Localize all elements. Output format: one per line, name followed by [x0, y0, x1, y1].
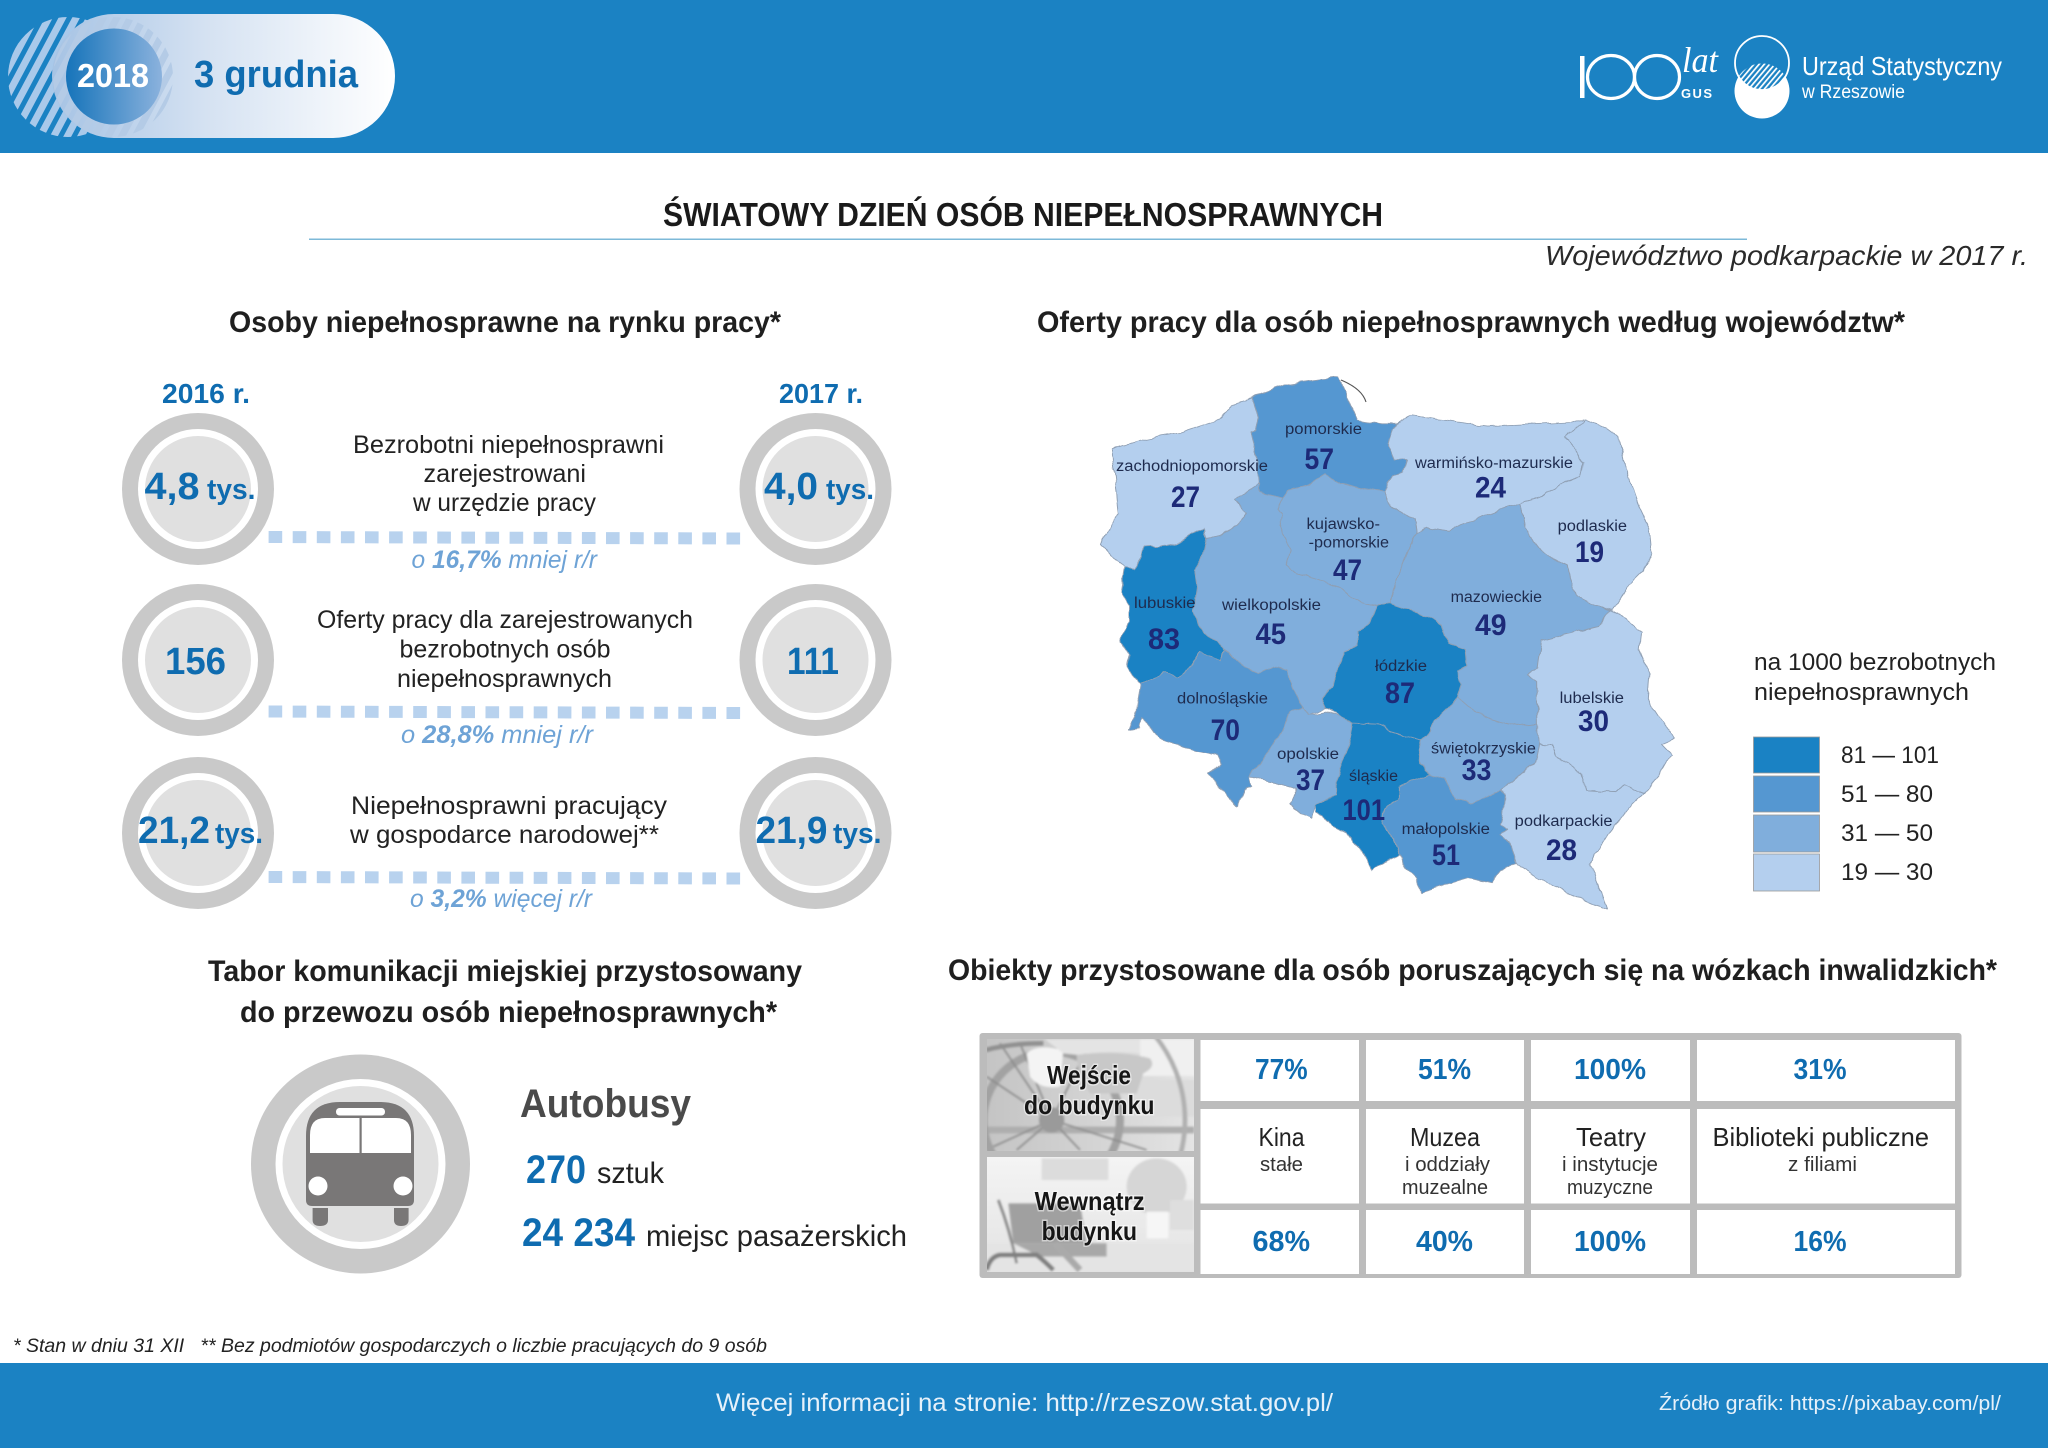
heading: facilities: Obiekty przystosowane dla osób poruszających się na wózkach inwalidzkich*	[948, 954, 1997, 987]
institution names: i instytucje	[1562, 1154, 1658, 1176]
interior percentages: 100%	[1574, 1226, 1646, 1258]
region labels and values: 49	[1475, 609, 1506, 642]
entrance percentages: 100%	[1574, 1054, 1646, 1086]
heading: labour market: Osoby niepełnosprawne na rynku pracy*	[229, 306, 781, 339]
description: zarejestrowani	[424, 460, 586, 488]
circle 4,0 tys.: 4,0	[764, 466, 818, 508]
logo: 100 lat GUS: lat	[1682, 40, 1719, 80]
passenger seats: 24 234	[522, 1211, 636, 1255]
circle 21,2 tys.: 21,2	[138, 810, 210, 852]
entrance percentages: 77%	[1255, 1054, 1308, 1086]
description	[349, 792, 668, 849]
map legend: na 1000 bezrobotnych	[1754, 649, 1996, 676]
footer source: Źródło grafik: https://pixabay.com/pl/	[1659, 1392, 2001, 1415]
passenger seats: miejsc pasażerskich	[646, 1220, 907, 1253]
label: do budynku	[1024, 1090, 1154, 1120]
description	[353, 431, 664, 517]
region labels and values: mazowieckie	[1451, 589, 1542, 606]
interior percentages: 16%	[1794, 1226, 1847, 1258]
label: Wewnątrz	[1035, 1186, 1145, 1216]
institution names: Teatry	[1576, 1122, 1646, 1152]
footer link: Więcej informacji na stronie: http://rzeszow.stat.gov.pl/	[716, 1389, 1333, 1417]
bus title: Autobusy	[520, 1082, 692, 1126]
region labels and values: 57	[1304, 443, 1334, 476]
circle 4,8 tys.	[122, 413, 274, 565]
logo: Urząd Statystyczny	[1734, 36, 2002, 118]
bus count	[526, 1148, 665, 1192]
entrance percentages: 31%	[1794, 1054, 1847, 1086]
region labels and values: śląskie	[1349, 768, 1398, 785]
row: job offers	[122, 584, 892, 749]
row: unemployed	[122, 413, 892, 574]
institution names: stałe	[1260, 1154, 1303, 1176]
change: o 16,7% mniej r/r	[412, 546, 599, 574]
circle 21,9 tys.	[740, 757, 892, 909]
circle 21,2 tys.	[122, 757, 274, 909]
map of Poland	[1100, 378, 1674, 910]
region labels and values: 30	[1578, 705, 1609, 738]
logo: Urząd Statystyczny: w Rzeszowie	[1801, 82, 1905, 103]
change: o 28,8% mniej r/r	[401, 721, 595, 749]
region labels and values: kujawsko-	[1306, 516, 1380, 533]
description: bezrobotnych osób	[400, 636, 610, 664]
photo: building entrance	[987, 1039, 1194, 1151]
bus count: 270	[526, 1148, 586, 1192]
map legend: 81 — 101	[1841, 742, 1939, 769]
subtitle: Województwo podkarpackie w 2017 r.	[1545, 240, 2028, 271]
region labels and values: zachodniopomorskie	[1116, 458, 1268, 475]
region labels and values: opolskie	[1277, 746, 1339, 763]
bus count: sztuk	[597, 1157, 665, 1190]
region labels and values: podlaskie	[1558, 518, 1627, 535]
label: budynku	[1042, 1216, 1137, 1246]
circle 4,8 tys.: tys.	[207, 474, 256, 506]
institution names: Muzea	[1410, 1122, 1480, 1152]
map legend	[1754, 649, 1996, 891]
heading: map: Oferty pracy dla osób niepełnosprawnych według województw*	[1037, 306, 1905, 339]
region labels and values: małopolskie	[1402, 821, 1490, 838]
circle 111: 111	[787, 641, 839, 683]
panel: labour market comparison	[122, 378, 892, 913]
circle 4,8 tys.: 4,8	[144, 466, 200, 508]
entrance percentages	[1255, 1054, 1847, 1086]
label: Wejście	[1047, 1060, 1131, 1090]
interior percentages: 68%	[1252, 1226, 1310, 1258]
year: 2018	[77, 57, 149, 94]
cells row 1	[1200, 1040, 1955, 1101]
region labels and values: lubuskie	[1134, 595, 1196, 612]
interior percentages	[1252, 1226, 1847, 1258]
map legend: 31 — 50	[1841, 820, 1933, 847]
institution names: Kina	[1258, 1122, 1305, 1152]
region labels and values: -pomorskie	[1309, 534, 1389, 552]
date badge	[8, 14, 395, 138]
description	[317, 606, 693, 693]
row: employed	[122, 757, 892, 913]
region labels and values: 37	[1296, 764, 1325, 797]
region labels and values: wielkopolskie	[1221, 597, 1321, 614]
heading: transport: do przewozu osób niepełnosprawnych*	[240, 996, 777, 1029]
circle 111	[740, 584, 892, 736]
institution names	[1258, 1122, 1929, 1199]
institution names: z filiami	[1788, 1154, 1857, 1176]
region labels and values: pomorskie	[1285, 421, 1362, 438]
map legend: 51 — 80	[1841, 781, 1933, 808]
logo: 100 lat GUS: GUS	[1681, 86, 1712, 101]
date: 3 grudnia	[194, 54, 359, 96]
region labels and values: 24	[1475, 472, 1506, 504]
icon: bus	[251, 1054, 470, 1274]
circle 156: 156	[165, 641, 226, 683]
heading: transport	[208, 955, 802, 1029]
institution names: muzyczne	[1567, 1177, 1653, 1199]
cells row 3	[1200, 1210, 1955, 1274]
region labels and values	[1116, 421, 1627, 872]
passenger seats	[522, 1211, 907, 1255]
institution names: i oddziały	[1405, 1154, 1490, 1176]
circle 21,2 tys.: tys.	[215, 818, 263, 850]
map legend: niepełnosprawnych	[1754, 679, 1969, 706]
year label 2017: 2017 r.	[779, 378, 863, 409]
region labels and values: 47	[1333, 554, 1362, 587]
region labels and values: 87	[1385, 677, 1415, 710]
region labels and values: świętokrzyskie	[1431, 741, 1536, 758]
region labels and values: łódzkie	[1375, 658, 1427, 675]
map legend: 19 — 30	[1841, 859, 1933, 886]
circle 4,0 tys.	[740, 413, 892, 565]
logo: Urząd Statystyczny: Urząd Statystyczny	[1802, 51, 2002, 81]
title: ŚWIATOWY DZIEŃ OSÓB NIEPEŁNOSPRAWNYCH	[663, 196, 1383, 233]
cells row 2	[1200, 1109, 1955, 1204]
region labels and values: 19	[1575, 536, 1604, 569]
description: w gospodarce narodowej**	[349, 821, 659, 849]
region labels and values: 27	[1171, 481, 1200, 514]
bus statistics	[520, 1082, 907, 1255]
description: w urzędzie pracy	[412, 489, 596, 517]
institution names: Biblioteki publiczne	[1712, 1122, 1929, 1152]
description: Oferty pracy dla zarejestrowanych	[317, 606, 693, 634]
header band	[0, 0, 2048, 153]
footnote: * Stan w dniu 31 XII ** Bez podmiotów gospodarczych o liczbie pracujących do 9 osób	[13, 1335, 767, 1357]
region labels and values: 51	[1432, 839, 1460, 872]
circle 21,9 tys.: 21,9	[756, 810, 828, 852]
change: o 3,2% więcej r/r	[410, 885, 594, 913]
photo: inside building	[986, 1157, 1194, 1272]
description: Bezrobotni niepełnosprawni	[353, 431, 664, 459]
circle 156	[122, 584, 274, 736]
region labels and values: warmińsko-mazurskie	[1414, 455, 1573, 472]
table: accessible facilities	[980, 1033, 1962, 1278]
region labels and values: 83	[1148, 623, 1180, 656]
entrance percentages: 51%	[1418, 1054, 1471, 1086]
region labels and values: 45	[1256, 618, 1286, 651]
description: niepełnosprawnych	[397, 665, 612, 693]
description: Niepełnosprawni pracujący	[351, 792, 668, 820]
region labels and values: podkarpackie	[1515, 813, 1613, 830]
region labels and values: 33	[1462, 754, 1491, 787]
logo: 100 lat GUS	[1580, 40, 1719, 101]
region labels and values: 70	[1211, 714, 1240, 747]
region labels and values: 28	[1546, 834, 1577, 867]
year label 2016: 2016 r.	[162, 378, 250, 409]
circle 4,0 tys.: tys.	[826, 474, 874, 506]
heading: transport: Tabor komunikacji miejskiej przystosowany	[208, 955, 802, 988]
region labels and values: lubelskie	[1560, 690, 1624, 707]
institution names: muzealne	[1402, 1177, 1488, 1199]
region labels and values: dolnośląskie	[1177, 691, 1268, 708]
circle 21,9 tys.: tys.	[833, 818, 882, 850]
interior percentages: 40%	[1416, 1226, 1473, 1258]
region labels and values: 101	[1342, 794, 1385, 827]
footer band	[0, 1363, 2048, 1448]
